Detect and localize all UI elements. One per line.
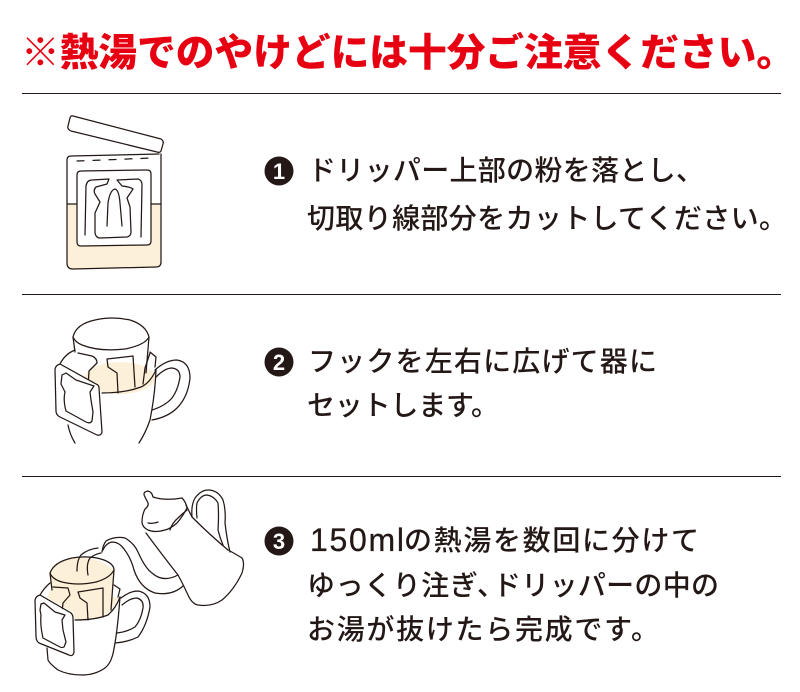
number badge 2: 2 — [273, 350, 285, 375]
text: step 3: の熱湯を数回に分けて — [404, 525, 699, 556]
icon: drip bag with cut line — [67, 116, 163, 269]
text: step 2: セットします。 — [307, 390, 499, 421]
text: step 3 — [307, 522, 719, 645]
title: ※熱湯でのやけどには十分ご注意ください。 — [21, 31, 795, 75]
number badge 3: 3 — [273, 529, 285, 554]
text: step 3: お湯が抜けたら完成です。 — [307, 614, 659, 645]
icon: drip bag on mug — [55, 318, 190, 443]
number badge 2 — [264, 348, 294, 376]
number badge 3 — [264, 526, 294, 556]
icon: kettle pouring onto drip bag on mug — [35, 490, 244, 675]
text: step 1: ドリッパー上部の粉を落とし、 — [308, 155, 704, 186]
text: step 2 — [307, 346, 657, 421]
panel: step 3 — [35, 490, 719, 675]
text: step 1 — [307, 155, 787, 234]
text: step 1: 切取り線部分をカットしてください。 — [307, 203, 787, 234]
text: step 3: 150ml — [310, 522, 404, 558]
text: step 3: ドリッパーの中の — [493, 570, 719, 601]
panel: step 1 — [67, 116, 787, 269]
text: step 3: ゆっくり注ぎ、 — [307, 570, 505, 601]
text: step 2: フックを左右に広げて器に — [308, 346, 657, 377]
panel: step 2 — [55, 318, 657, 443]
number badge 1 — [264, 156, 294, 186]
number badge 1: 1 — [273, 159, 285, 184]
